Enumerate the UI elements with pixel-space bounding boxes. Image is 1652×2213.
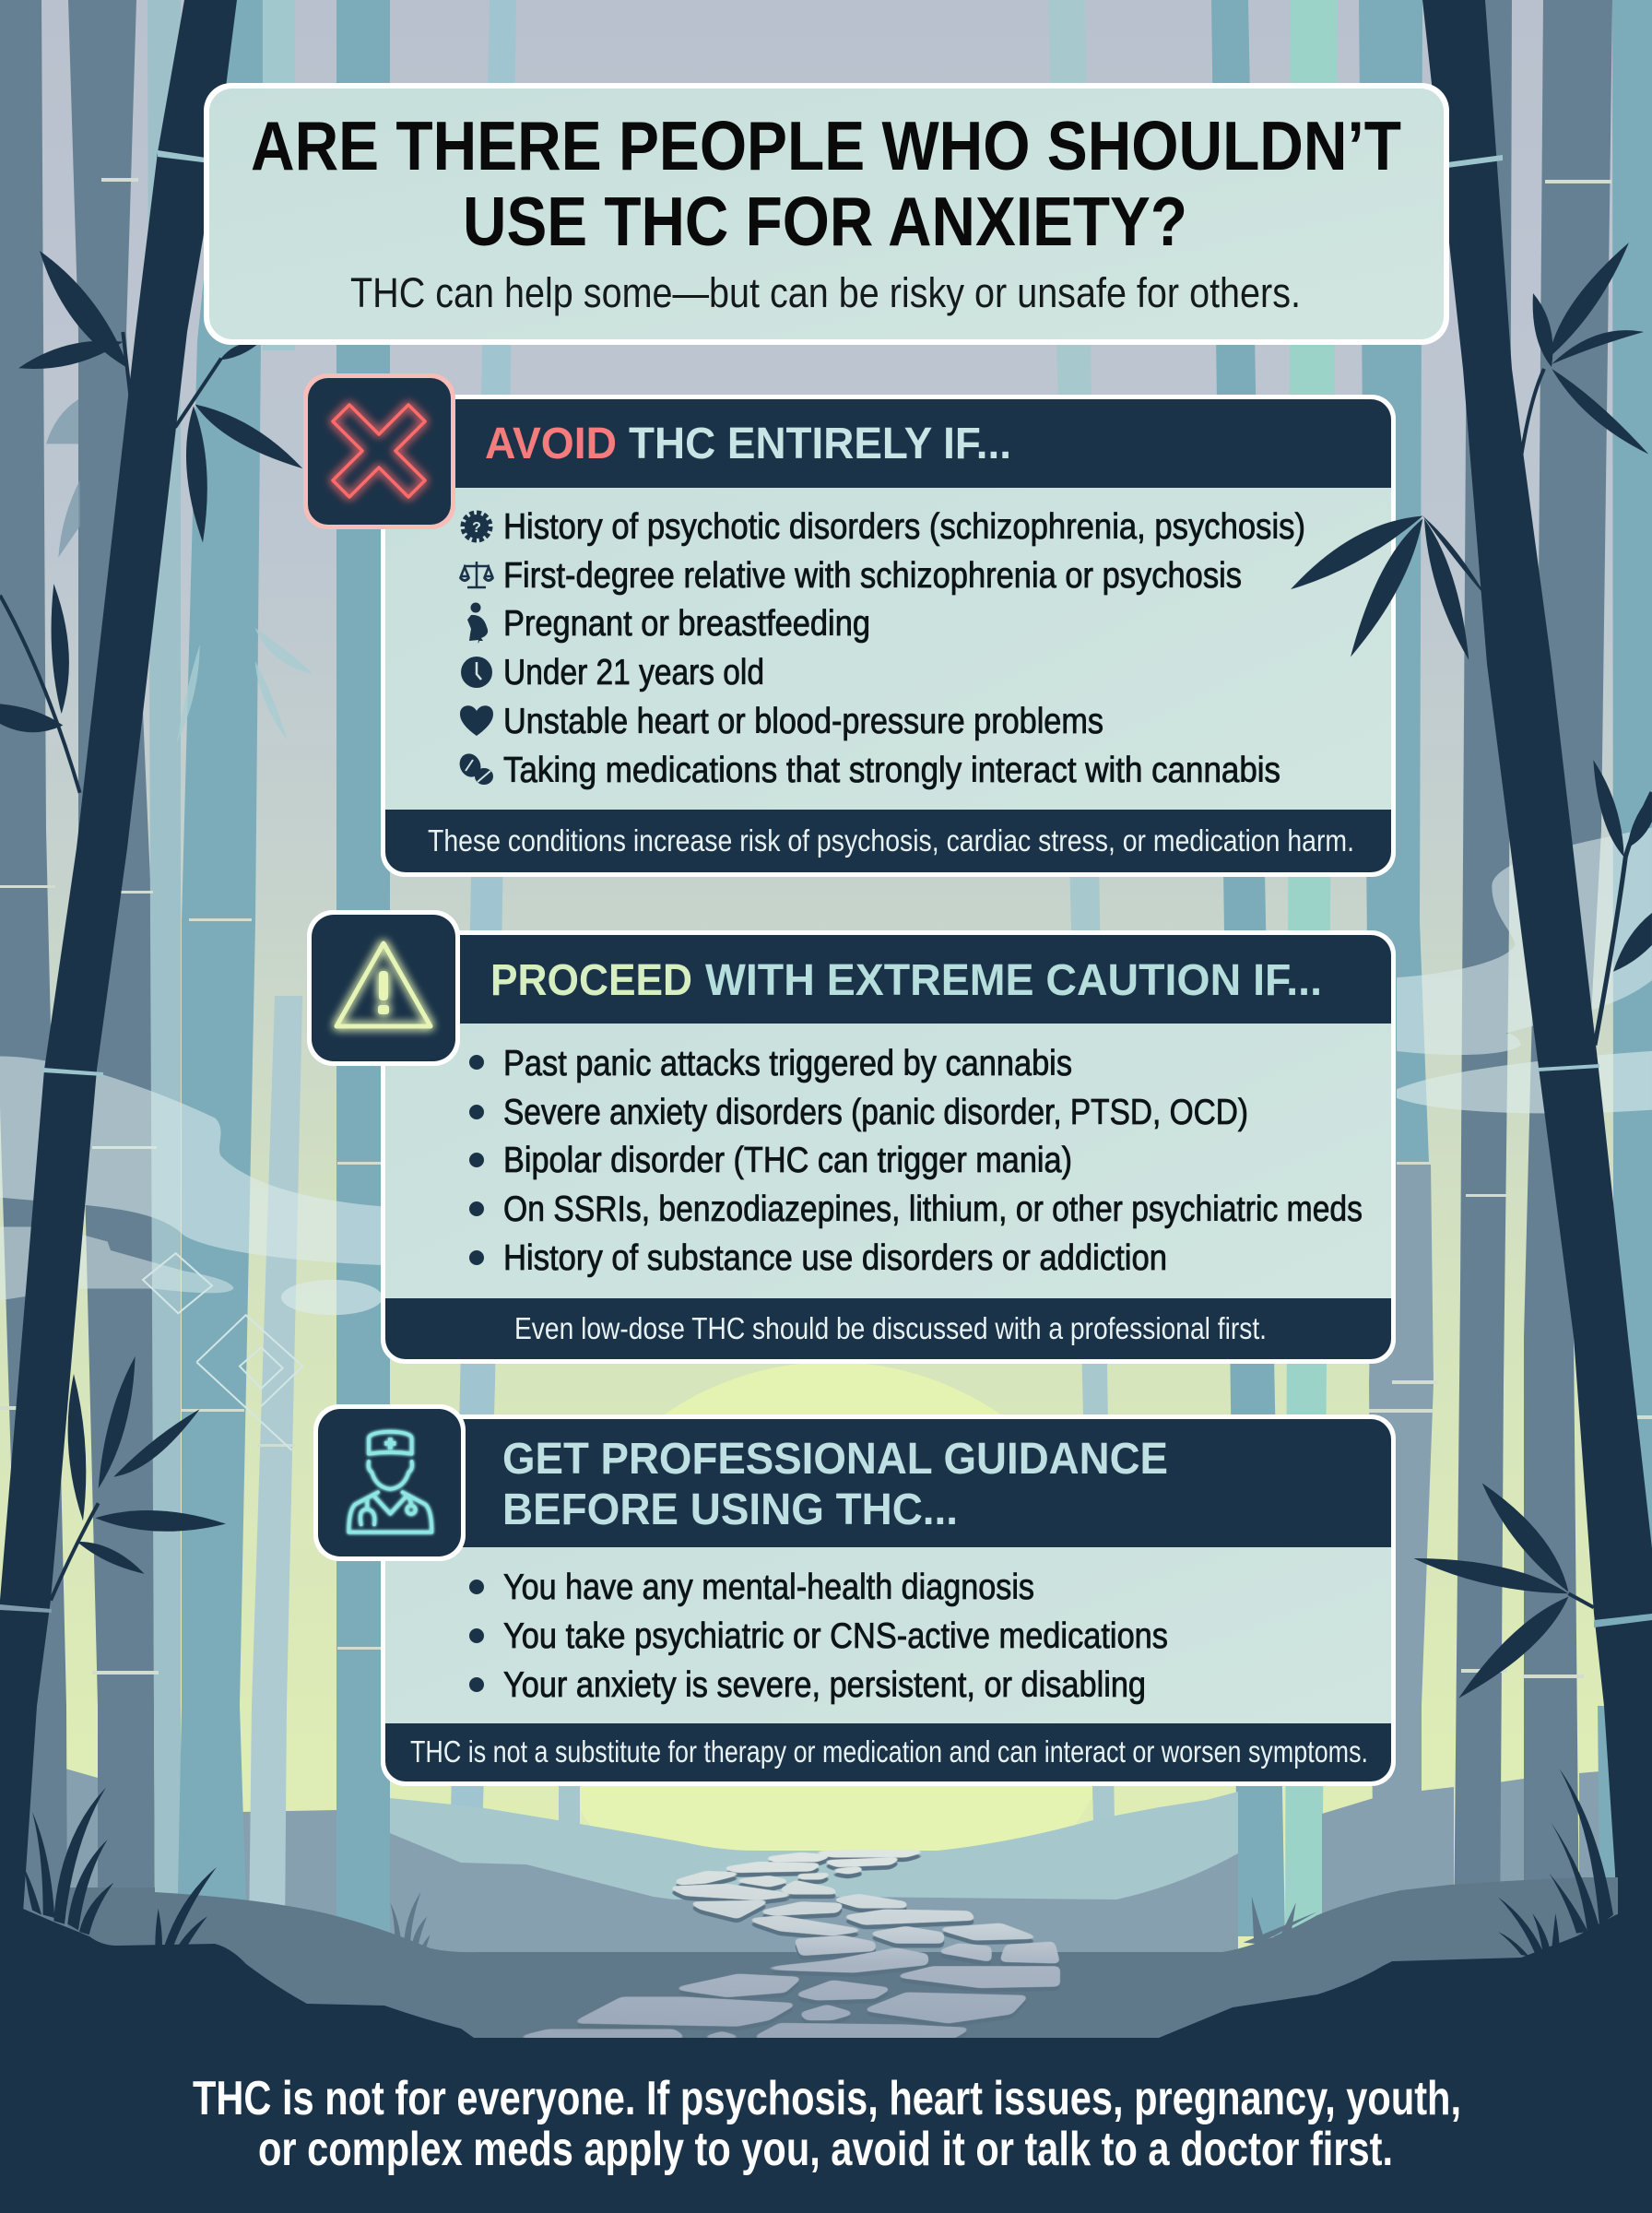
- left foreground bamboo trunk: [0, 0, 237, 1913]
- title heading: [251, 107, 1401, 260]
- icon: scales: [460, 562, 493, 587]
- leaves: lower right cluster: [1413, 1483, 1594, 1698]
- ground: pale far hill: [390, 1792, 1238, 1955]
- panel list: On SSRIs, benzodiazepines, lithium, or other psychiatric meds: [503, 1189, 1363, 1229]
- panel heading: PROCEED: [490, 956, 692, 1005]
- panel list: [503, 1568, 1168, 1705]
- panel heading: THC ENTIRELY IF...: [629, 420, 1011, 468]
- panel list: [503, 1044, 1363, 1278]
- bullets: [469, 1055, 484, 1265]
- panel header bar: [385, 935, 1391, 1024]
- icon: doctor badge: [313, 1404, 466, 1561]
- faint background leaves: [46, 399, 313, 743]
- right foreground bamboo trunk: [1422, 0, 1652, 1982]
- panel list: [503, 507, 1305, 790]
- panel footer bar: [385, 1723, 1391, 1781]
- bamboo nodes: [0, 178, 1652, 1678]
- title heading: USE THC FOR ANXIETY?: [463, 183, 1187, 260]
- panel heading: WITH EXTREME CAUTION IF...: [705, 956, 1322, 1005]
- panel heading: AVOID: [485, 420, 617, 468]
- closing message: [193, 2072, 1461, 2176]
- panel heading: GET PROFESSIONAL GUIDANCE: [502, 1435, 1168, 1484]
- icon: red X badge: [303, 373, 455, 529]
- leaves: upper right cluster: [1533, 243, 1644, 367]
- panel list: Under 21 years old: [503, 653, 764, 692]
- icon: warning triangle badge: [307, 910, 460, 1066]
- icon: gear with question mark: ?: [472, 520, 481, 536]
- panel footer note: These conditions increase risk of psychosis, cardiac stress, or medication harm.: [428, 823, 1354, 858]
- panel list: Unstable heart or blood-pressure problems: [503, 702, 1103, 741]
- panel: avoid: [381, 395, 1396, 877]
- panel list: Severe anxiety disorders (panic disorder, PTSD, OCD): [503, 1093, 1248, 1132]
- icon: pills: [456, 751, 493, 785]
- panel header bar: [385, 399, 1391, 488]
- panel list: First-degree relative with schizophrenia or psychosis: [503, 556, 1242, 596]
- closing message: or complex meds apply to you, avoid it or talk to a doctor first.: [258, 2123, 1393, 2176]
- subtitle: THC can help some—but can be risky or unsafe for others.: [350, 269, 1301, 316]
- panel list: Your anxiety is severe, persistent, or disabling: [503, 1665, 1146, 1705]
- icon: heart: [460, 705, 493, 736]
- grass tuft: centre right: [1244, 1897, 1317, 1944]
- panel footer note: Even low-dose THC should be discussed with a professional first.: [514, 1311, 1267, 1345]
- title heading: ARE THERE PEOPLE WHO SHOULDN’T: [251, 107, 1401, 184]
- glowing sun: [537, 1362, 1127, 1952]
- mist: left side: [0, 1057, 383, 1450]
- panel footer bar: [385, 810, 1391, 872]
- title card: [204, 83, 1449, 345]
- stone path: [516, 1851, 1059, 2042]
- panel heading: BEFORE USING THC...: [502, 1485, 958, 1534]
- panel list: You take psychiatric or CNS-active medications: [503, 1616, 1168, 1656]
- ground: hill sliver between trunks: [67, 1888, 155, 1964]
- grass tufts: lower left: [25, 1787, 431, 1950]
- ground: middle hill: [390, 1798, 1374, 1964]
- panel list: Bipolar disorder (THC can trigger mania): [503, 1141, 1072, 1180]
- panel: caution: [381, 930, 1396, 1364]
- panel list: Taking medications that strongly interact with cannabis: [503, 751, 1280, 790]
- foreground dark ground: [0, 1899, 1652, 2213]
- mist: right side: [1397, 827, 1652, 1113]
- panel header bar: [385, 1419, 1391, 1547]
- distant hill segments: [55, 1766, 1600, 1936]
- panel: professional guidance: [381, 1414, 1396, 1786]
- bullets: [469, 1580, 484, 1692]
- icon: clock: [461, 657, 492, 688]
- panel list: Pregnant or breastfeeding: [503, 604, 870, 644]
- icon: pregnant person: [467, 603, 488, 644]
- panel list: History of substance use disorders or addiction: [503, 1238, 1167, 1278]
- ground: near hill: [155, 1877, 1618, 2047]
- panel list: You have any mental-health diagnosis: [503, 1568, 1034, 1607]
- panel heading: [502, 1435, 1168, 1534]
- leaves: upper left cluster: [0, 251, 302, 793]
- panel list: Past panic attacks triggered by cannabis: [503, 1044, 1072, 1083]
- leaves: lower left cluster: [51, 1356, 226, 1601]
- panel footer bar: [385, 1298, 1391, 1359]
- panel footer note: THC is not a substitute for therapy or medication and can interact or worsen symptoms.: [410, 1734, 1368, 1769]
- icon: gear with question mark: [463, 513, 490, 540]
- grass tufts: lower right: [1498, 1769, 1613, 1957]
- leaves: right cluster over first panel: [1291, 369, 1652, 1045]
- panel list: History of psychotic disorders (schizophrenia, psychosis): [503, 507, 1305, 547]
